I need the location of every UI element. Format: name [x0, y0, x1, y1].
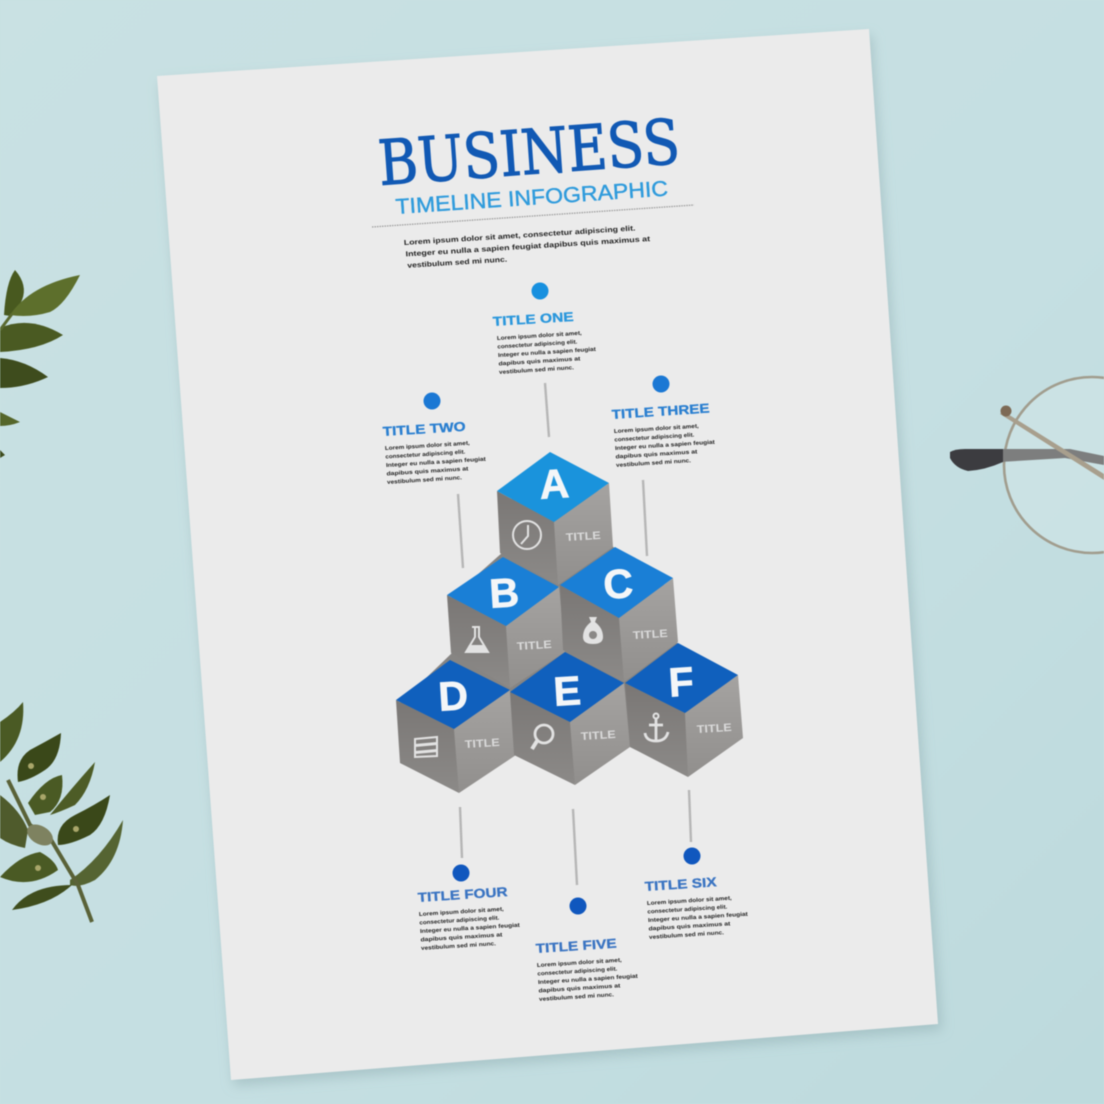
- title: BUSINESS: BUSINESS: [376, 105, 682, 200]
- cube A: [497, 452, 613, 585]
- step two: dot, title, text: Integer eu nulla a sapien feugiat: [386, 457, 486, 469]
- step four: dot, title, text: vestibulum sed mi nunc.: [421, 941, 497, 952]
- cube B: [447, 557, 565, 688]
- step three: dot, title, text: TITLE THREE: [611, 401, 710, 422]
- step four: dot, title, text: consectetur adipiscing elit.: [419, 915, 500, 926]
- cube F: F: [667, 658, 695, 706]
- step one: dot, title, text: consectetur adipiscing elit.: [497, 339, 578, 350]
- subtitle: TIMELINE INFOGRAPHIC: TIMELINE INFOGRAPHIC: [395, 176, 669, 219]
- paper shadow: [160, 35, 942, 1086]
- step four: dot, title, text: dapibus quis maximus at: [420, 932, 503, 943]
- icon: money bag: [583, 617, 603, 644]
- step five: dot, title, text: [535, 898, 639, 1003]
- cube C: [560, 547, 678, 682]
- connector lines: [458, 383, 691, 885]
- step one: dot, title, text: Integer eu nulla a sapien feugiat: [498, 347, 596, 359]
- paper sheet: [157, 29, 938, 1080]
- cube B: B: [488, 569, 520, 617]
- step four: dot, title, text: TITLE FOUR: [417, 884, 509, 905]
- step six: dot, title, text: Lorem ipsum dolor sit amet,: [647, 896, 732, 907]
- cube E: TITLE: [580, 729, 616, 743]
- cube A: TITLE: [565, 530, 601, 544]
- icon: stacked ledger: [415, 737, 437, 757]
- step five: dot, title, text: vestibulum sed mi nunc.: [539, 992, 615, 1003]
- step one: dot, title, text: [492, 282, 597, 376]
- step five: dot, title, text: dapibus quis maximus at: [538, 983, 621, 994]
- step one: dot, title, text: TITLE ONE: [492, 309, 574, 329]
- step three: dot, title, text: Integer eu nulla a sapien feugiat: [615, 440, 715, 452]
- step one: dot, title, text: dapibus quis maximus at: [498, 356, 581, 367]
- step two: dot, title, text: vestibulum sed mi nunc.: [387, 475, 463, 486]
- cube C: C: [602, 560, 634, 608]
- step two: dot, title, text: consectetur adipiscing elit.: [385, 449, 466, 460]
- plant sprig, upper left: [0, 270, 80, 458]
- step six: dot, title, text: vestibulum sed mi nunc.: [649, 930, 725, 941]
- step four: dot, title, text: Lorem ipsum dolor sit amet,: [419, 907, 504, 918]
- cube F: [625, 643, 743, 777]
- step one: dot, title, text: Lorem ipsum dolor sit amet,: [497, 331, 582, 342]
- icon: anchor: [645, 714, 668, 741]
- icon: clock: [513, 521, 541, 549]
- step three: dot, title, text: consectetur adipiscing elit.: [614, 432, 695, 443]
- cube F: TITLE: [696, 722, 732, 736]
- step five: dot, title, text: consectetur adipiscing elit.: [537, 966, 618, 977]
- step three: dot, title, text: [611, 376, 716, 469]
- step two: dot, title, text: [382, 392, 487, 486]
- step six: dot, title, text: consectetur adipiscing elit.: [647, 904, 728, 915]
- eyeglasses: [950, 377, 1104, 553]
- icon: magnifier: [532, 725, 553, 749]
- icon: flask: [465, 627, 488, 653]
- cube A: A: [538, 460, 570, 508]
- dotted divider: [372, 205, 694, 227]
- step six: dot, title, text: dapibus quis maximus at: [648, 921, 731, 932]
- step two: dot, title, text: TITLE TWO: [382, 419, 466, 439]
- step two: dot, title, text: dapibus quis maximus at: [386, 466, 469, 477]
- intro paragraph: Integer eu nulla a sapien feugiat dapibus quis maximus at: [405, 234, 651, 258]
- step four: dot, title, text: [417, 864, 521, 952]
- step three: dot, title, text: dapibus quis maximus at: [615, 449, 698, 460]
- step two: dot, title, text: Lorem ipsum dolor sit amet,: [385, 441, 470, 452]
- cube D: D: [437, 672, 469, 720]
- plant sprig, lower left: [0, 702, 123, 922]
- intro paragraph: [404, 223, 652, 270]
- cube B: TITLE: [516, 639, 552, 653]
- cube E: E: [552, 667, 582, 715]
- step five: dot, title, text: Integer eu nulla a sapien feugiat: [538, 974, 638, 986]
- step five: dot, title, text: TITLE FIVE: [535, 936, 617, 956]
- cube D: TITLE: [464, 737, 500, 751]
- step six: dot, title, text: TITLE SIX: [644, 874, 717, 894]
- cube E: [510, 652, 630, 785]
- intro paragraph: Lorem ipsum dolor sit amet, consectetur adipiscing elit.: [404, 223, 636, 247]
- step three: dot, title, text: vestibulum sed mi nunc.: [616, 458, 692, 469]
- step three: dot, title, text: Lorem ipsum dolor sit amet,: [614, 424, 699, 435]
- step five: dot, title, text: Lorem ipsum dolor sit amet,: [537, 958, 622, 969]
- step one: dot, title, text: vestibulum sed mi nunc.: [499, 365, 575, 376]
- step four: dot, title, text: Integer eu nulla a sapien feugiat: [420, 923, 520, 935]
- step six: dot, title, text: Integer eu nulla a sapien feugiat: [648, 912, 748, 924]
- step six: dot, title, text: [644, 848, 749, 941]
- cube D: [396, 660, 516, 793]
- intro paragraph: vestibulum sed mi nunc.: [407, 255, 507, 270]
- cube C: TITLE: [632, 628, 668, 642]
